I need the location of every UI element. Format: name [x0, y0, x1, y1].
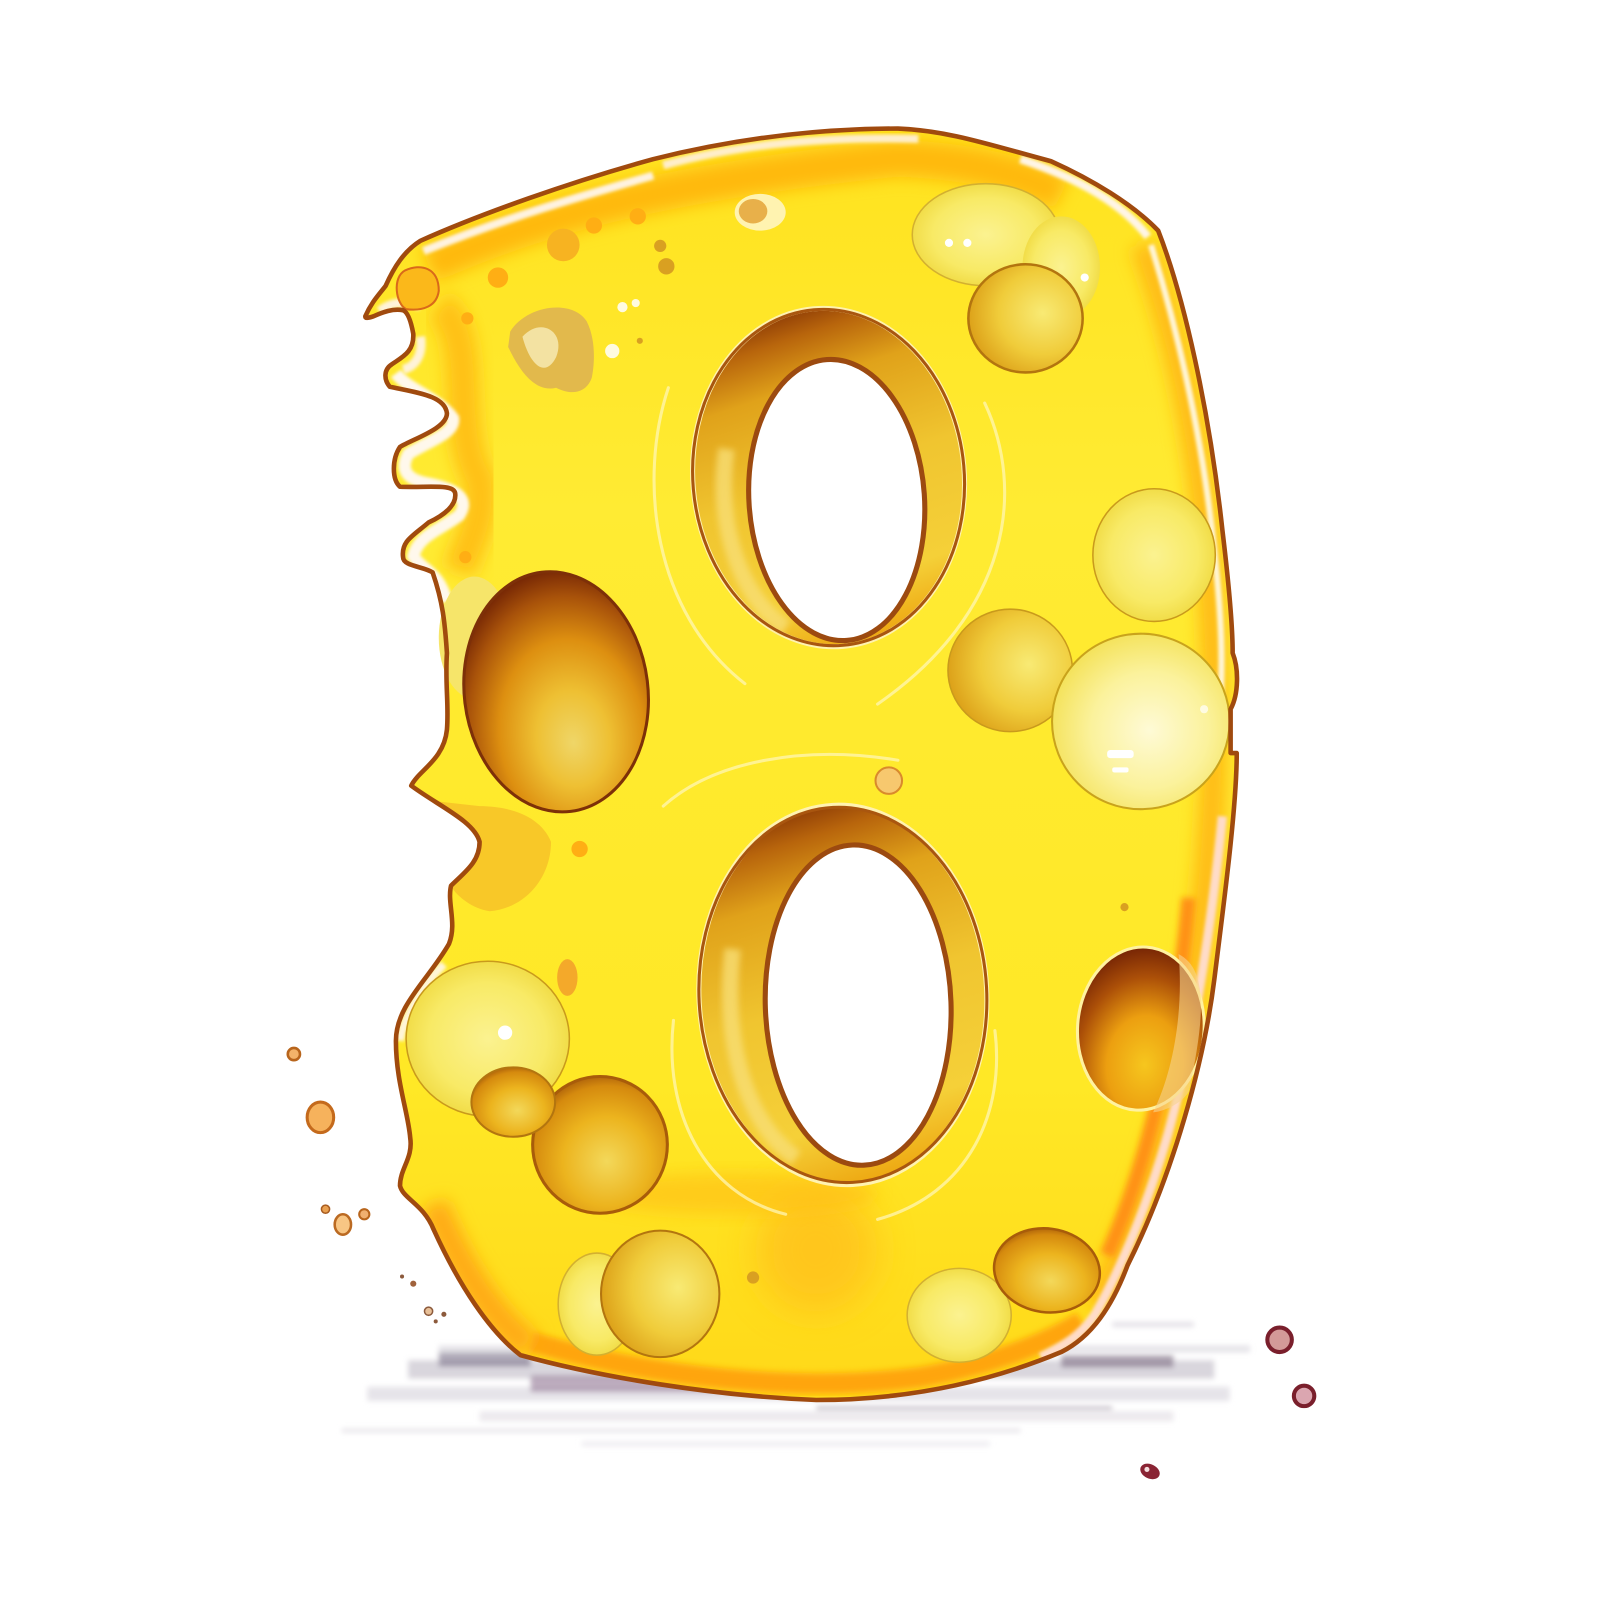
- large pale bubble: [1052, 634, 1230, 809]
- bottom bubble front: [601, 1231, 719, 1357]
- right hole: [1072, 943, 1210, 1114]
- bubbles: [406, 184, 1230, 1362]
- ring highlight: [730, 949, 796, 1158]
- ring: [689, 798, 996, 1192]
- ring: [679, 297, 979, 658]
- deep holes: [434, 561, 1210, 1213]
- body fill: [365, 129, 1237, 1400]
- ground shadow: [342, 1324, 1250, 1444]
- ring outline: [689, 800, 996, 1190]
- large left hole: [450, 561, 662, 823]
- upper hole of the eight: [679, 297, 979, 658]
- crumbs right: [1138, 1328, 1314, 1482]
- lower left pale bubble: [406, 961, 569, 1116]
- bottom bubble back: [558, 1253, 636, 1355]
- bottom right bubble: [907, 1268, 1011, 1362]
- orange specks: [459, 208, 646, 857]
- right hole glaze: [1153, 954, 1201, 1112]
- edge colouring: [380, 138, 1222, 1383]
- cheese body: [365, 129, 1237, 1400]
- brown specks: [637, 240, 1129, 1284]
- lower left small bubble: [471, 1067, 555, 1137]
- bubble upper right front: [968, 264, 1083, 372]
- bite pocket: [434, 801, 551, 911]
- bottom right bubble dark: [989, 1222, 1105, 1319]
- opening: [760, 842, 957, 1168]
- small pit inner: [739, 199, 767, 223]
- pit cluster: [508, 308, 594, 392]
- lower-left hole: [533, 1077, 667, 1213]
- illustration: cheese number eight: [286, 126, 1316, 1480]
- lower hole of the eight: [689, 798, 996, 1192]
- small pit: [547, 229, 580, 261]
- white glints: [605, 299, 640, 358]
- ring outline: [679, 298, 978, 657]
- bubble glints: [498, 239, 1208, 1040]
- bubble upper right side: [1022, 216, 1100, 318]
- top-left crumbly pits: [397, 194, 1129, 1284]
- bubble middle: [948, 609, 1072, 732]
- small orange pit: [557, 959, 578, 996]
- left pale bubble: [439, 577, 510, 699]
- pit cluster highlight: [522, 327, 558, 368]
- ring highlight: [724, 449, 786, 628]
- bubble upper right back: [912, 184, 1059, 286]
- crumbs left: [288, 1048, 446, 1323]
- small pit with highlight: [735, 194, 786, 231]
- cheese outline: [365, 129, 1237, 1400]
- bite pit: [397, 267, 439, 310]
- opening: [739, 353, 934, 647]
- small pit above lower hole: [876, 767, 902, 794]
- glaze swirl lines: [654, 388, 1005, 1219]
- bubble right: [1093, 489, 1215, 621]
